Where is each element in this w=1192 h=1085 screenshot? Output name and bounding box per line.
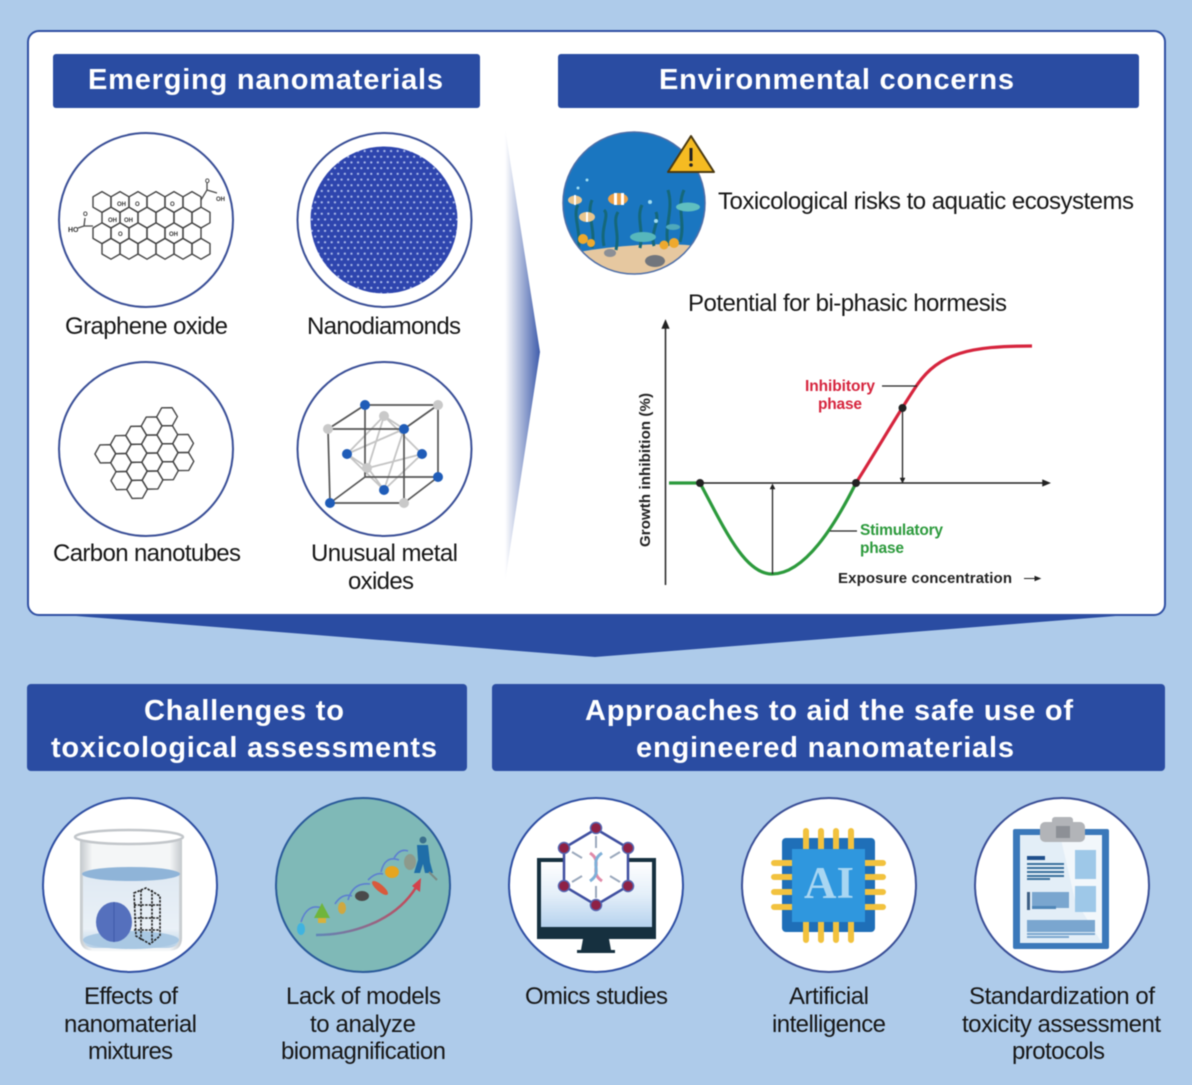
x axis label: Exposure concentration — [838, 570, 1012, 587]
item: carbon nanotubes — [53, 362, 241, 567]
x axis label arrow — [1024, 576, 1040, 580]
item: graphene oxide: O — [205, 179, 210, 185]
green curve — [669, 483, 856, 574]
icon: monitor — [537, 858, 656, 953]
icon: beaker — [75, 830, 183, 951]
item: graphene oxide: OH — [169, 232, 178, 238]
text: toxicological risks: Toxicological risks to aquatic ecosystems — [718, 188, 1134, 215]
item: biomagnification: Lack of models — [286, 983, 441, 1010]
item: nanomaterial mixtures — [43, 798, 217, 1065]
item: graphene oxide: Graphene oxide — [65, 313, 228, 340]
item: unusual metal oxides: oxides — [348, 568, 414, 595]
icon: food chain — [297, 836, 437, 935]
item: biomagnification: to analyze — [310, 1011, 416, 1038]
item: unusual metal oxides: Unusual metal — [311, 540, 458, 567]
item: graphene oxide: O — [170, 202, 175, 208]
item: standardization — [962, 798, 1161, 1065]
item: nanomaterial mixtures: mixtures — [88, 1038, 173, 1065]
item: omics studies — [509, 798, 683, 1010]
phase label: inhibitory — [805, 378, 875, 413]
item: artificial intelligence — [742, 798, 916, 1038]
phase label: inhibitory: phase — [818, 396, 862, 413]
phase label: stimulatory: Stimulatory — [860, 522, 943, 539]
chevron arrow — [38, 613, 1154, 657]
item: nanodiamonds — [298, 133, 472, 340]
item: nanomaterial mixtures: nanomaterial — [64, 1011, 197, 1038]
red curve — [856, 346, 1032, 483]
item: graphene oxide: HO — [68, 227, 79, 234]
item: biomagnification — [276, 798, 450, 1065]
icon: clipboard — [1013, 817, 1109, 949]
item: nanodiamonds: Nanodiamonds — [307, 313, 461, 340]
illustration: aquatic ecosystem — [560, 132, 710, 280]
item: omics studies: Omics studies — [525, 983, 668, 1010]
item: artificial intelligence: Artificial — [789, 983, 869, 1010]
marker lines — [696, 386, 917, 574]
item: nanomaterial mixtures: Effects of — [84, 983, 178, 1010]
heading: emerging nanomaterials — [53, 54, 480, 108]
item: graphene oxide: OH — [117, 202, 126, 208]
heading: approaches: Approaches to aid the safe use of — [585, 695, 1073, 727]
phase label: stimulatory — [860, 522, 943, 557]
icon: AI chip — [774, 831, 883, 940]
heading: emerging nanomaterials: Emerging nanomaterials — [88, 64, 443, 96]
y axis — [662, 321, 668, 585]
item: artificial intelligence: intelligence — [772, 1011, 886, 1038]
item: graphene oxide — [59, 133, 233, 340]
item: graphene oxide: O — [118, 232, 123, 238]
heading: environmental concerns — [558, 54, 1139, 108]
icon: warning triangle — [668, 136, 714, 172]
heading: environmental concerns: Environmental concerns — [659, 64, 1014, 96]
x axis — [700, 480, 1049, 486]
phase label: inhibitory: Inhibitory — [805, 378, 875, 395]
item: standardization: toxicity assessment — [962, 1011, 1161, 1038]
item: graphene oxide: O — [83, 212, 88, 218]
heading: approaches — [492, 684, 1165, 771]
arrow: between columns — [505, 128, 540, 582]
item: graphene oxide: O — [135, 202, 140, 208]
heading: challenges — [27, 684, 467, 771]
chart: hormesis dose-response curve — [637, 321, 1049, 587]
y axis label: Growth inhibition (%) — [637, 393, 654, 547]
item: biomagnification: biomagnification — [281, 1038, 446, 1065]
icon: molecular network — [558, 822, 634, 910]
item: carbon nanotubes: Carbon nanotubes — [53, 540, 241, 567]
item: unusual metal oxides — [298, 362, 472, 595]
item: graphene oxide: OH — [124, 218, 133, 224]
phase label: stimulatory: phase — [860, 540, 904, 557]
icon: AI chip: AI — [804, 858, 854, 908]
heading: challenges: Challenges to — [144, 695, 344, 727]
item: graphene oxide: OH — [216, 197, 225, 203]
item: graphene oxide: OH — [108, 218, 117, 224]
panel: top white panel — [28, 31, 1165, 615]
heading: approaches: engineered nanomaterials — [636, 732, 1014, 764]
heading: challenges: toxicological assessments — [51, 732, 437, 764]
item: standardization: protocols — [1012, 1038, 1105, 1065]
chart title: Potential for bi-phasic hormesis — [688, 290, 1007, 317]
item: standardization: Standardization of — [969, 983, 1155, 1010]
